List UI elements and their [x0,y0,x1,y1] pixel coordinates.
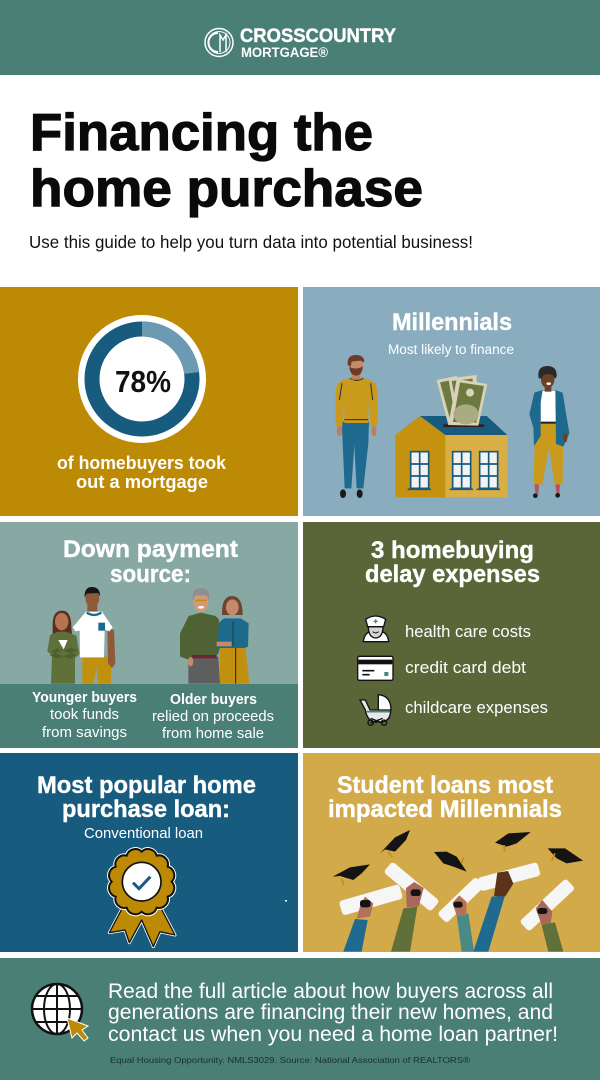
percent value: 78% [115,364,171,399]
woman [529,366,569,498]
heading: Student loans most [337,772,553,799]
icon: award ribbon [109,849,175,947]
money [437,375,487,426]
panel: 78 percent took a mortgage [0,287,298,516]
caption [57,453,227,492]
panel: millennials [303,287,600,516]
title: Financing the [30,104,373,162]
expense labels: credit card debt [405,659,526,677]
lower band [0,684,298,748]
icon: baby stroller [360,695,391,725]
younger buyers text: Younger buyers [32,690,137,706]
caption: out a mortgage [76,472,208,492]
call to action text: Read the full article about how buyers across all [108,980,553,1003]
heading [37,772,256,823]
diplomas [339,861,575,932]
younger buyers text [32,690,137,741]
arms [343,895,563,952]
illustration: man, house, money, woman [336,355,569,498]
logo wordmark [240,25,396,60]
caption: of homebuyers took [57,453,227,473]
call to action text [108,980,558,1046]
call to action text: generations are financing their new homes, and [108,1001,553,1024]
title [30,104,423,218]
heading: impacted Millennials [328,796,562,823]
heading: Most popular home [37,772,256,799]
older buyers text: relied on proceeds [152,709,274,725]
small speck [285,900,287,902]
younger buyers text: from savings [42,725,127,741]
older buyers text: Older buyers [170,692,257,708]
icon: globe with cursor [32,984,88,1041]
icon: credit card [358,656,393,680]
expense labels: health care costs [405,623,531,641]
panel: most popular loan [0,753,298,952]
header band with logo [0,0,600,75]
subtitle: Use this guide to help you turn data into potential business! [29,232,473,252]
heading [63,536,238,588]
expense labels: childcare expenses [405,699,548,717]
panel: student loans [303,753,600,952]
subheading: Most likely to finance [388,342,514,357]
heading: purchase loan: [62,796,230,823]
heading [328,772,562,823]
heading: 3 homebuying [371,537,534,564]
icon: nurse [363,616,389,642]
younger couple [47,587,115,684]
subheading: Conventional loan [84,826,203,842]
icons [358,616,393,725]
heading [365,537,540,588]
logo wordmark: MORTGAGE® [241,45,328,60]
title: home purchase [30,160,423,218]
call to action text: contact us when you need a home loan partner! [108,1023,558,1046]
panel: delay expenses [303,522,600,748]
panel: down payment source [0,522,298,748]
graduation caps [333,830,583,885]
disclaimer: Equal Housing Opportunity. NMLS3029. Source: National Association of REALTORS® [110,1055,471,1065]
heading: source: [110,561,191,588]
logo mark [205,28,233,56]
house [395,416,507,497]
footer band [0,958,600,1080]
older buyers text [152,692,274,742]
older buyers text: from home sale [162,726,264,742]
younger buyers text: took funds [50,707,119,723]
donut chart [78,315,206,443]
hands [357,871,552,925]
older couple [180,588,249,684]
heading: Down payment [63,536,238,563]
graduation illustration [333,830,583,952]
logo wordmark: CROSSCOUNTRY [240,25,396,47]
illustration: younger and older buyers [47,587,249,684]
man [336,355,377,498]
heading: Millennials [392,309,512,336]
expense labels [405,623,548,717]
heading: delay expenses [365,561,540,588]
